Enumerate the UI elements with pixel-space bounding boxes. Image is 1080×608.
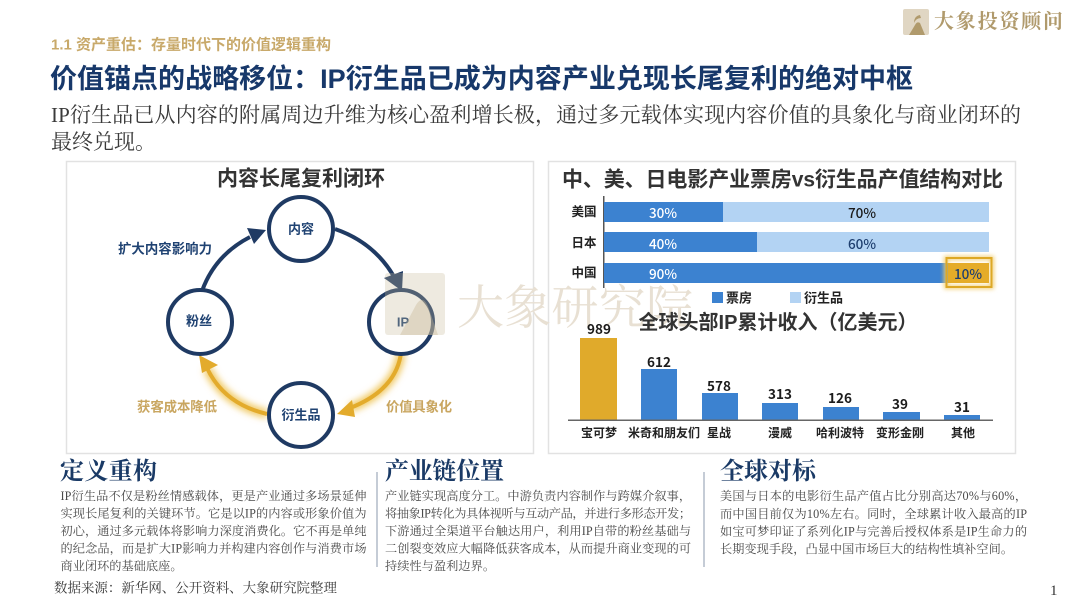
divider one [376, 472, 378, 567]
arrow: IP to derivatives [337, 353, 401, 417]
value chain text: 持续性与盈利边界。 [385, 558, 495, 573]
row: China [571, 258, 992, 287]
arrow: derivatives to fans [199, 355, 267, 414]
category labels: 宝可梦 [581, 425, 617, 440]
values: 39 [892, 393, 908, 413]
definition text: 商业闭环的基础底座。 [60, 558, 182, 573]
node: IP [369, 290, 433, 354]
chart heading: 全球头部IP累计收入（亿美元） [639, 310, 917, 334]
divider two [703, 472, 705, 567]
node: derivatives: 衍生品 [281, 408, 321, 422]
legend [712, 290, 843, 306]
watermark: 大象研究院 [457, 283, 693, 335]
node: derivatives [269, 383, 333, 447]
node: fans: 粉丝 [186, 314, 212, 328]
panel: content loop [66, 162, 534, 454]
category labels: 其他 [951, 425, 975, 440]
watermark [385, 273, 693, 335]
category labels: 星战 [707, 425, 731, 440]
definition text: 的纪念品，而是扩大IP影响力并构建内容创作与消费市场 [60, 540, 366, 556]
category labels [581, 425, 975, 440]
main title: 价值锚点的战略移位：IP衍生品已成为内容产业兑现长尾复利的绝对中枢 [50, 63, 913, 94]
label: expand influence: 扩大内容影响力 [118, 240, 212, 256]
values: 313 [768, 383, 792, 403]
page number: 1 [1050, 583, 1058, 599]
baseline [568, 420, 993, 421]
values: 126 [828, 387, 852, 407]
value chain heading: 产业链位置 [385, 458, 504, 485]
row: USA [571, 202, 989, 222]
values: 612 [647, 351, 671, 371]
benchmark heading: 全球对标 [720, 458, 818, 485]
node: fans [168, 290, 232, 354]
label: lower acquisition cost: 获客成本降低 [137, 398, 218, 414]
definition text: 初心，通过多元载体将影响力深度消费化。它不再是单纯 [60, 523, 366, 538]
values: 989 [587, 318, 611, 338]
loop heading: 内容长尾复利闭环 [217, 166, 385, 190]
benchmark text: 美国与日本的电影衍生品产值占比分别高达70%与60%， [720, 488, 1027, 503]
value chain text: 二创裂变效应大幅降低获客成本，从而提升商业变现的可 [385, 540, 691, 556]
column: global benchmark [720, 458, 1027, 556]
node: content: 内容 [288, 222, 314, 236]
category labels: 变形金刚 [876, 425, 924, 440]
label: value materialised: 价值具象化 [386, 398, 453, 414]
subtitle: IP衍生品已从内容的附属周边升维为核心盈利增长极，通过多元载体实现内容价值的具象化与商业闭环的 [51, 103, 1021, 128]
node: IP: IP [397, 314, 409, 330]
values [587, 318, 970, 416]
data source: 数据来源：新华网、公开资料、大象研究院整理 [54, 580, 338, 596]
values: 578 [707, 375, 731, 395]
subtitle [51, 103, 1021, 154]
value chain text: 将抽象IP转化为具体视听与互动产品，并进行多形态开发； [385, 506, 691, 520]
row: Japan: 60% [848, 233, 876, 253]
revenue bar chart [568, 310, 993, 440]
category labels: 漫威 [768, 425, 792, 440]
node: content [269, 197, 333, 261]
column: definition [60, 458, 366, 573]
section tag: 1.1 资产重估：存量时代下的价值逻辑重构 [51, 36, 331, 54]
value chain text: 产业链实现高度分工。中游负责内容制作与跨媒介叙事， [385, 488, 691, 503]
definition text [60, 488, 366, 573]
brand logo [903, 9, 1063, 35]
row: USA: 30% [649, 202, 677, 222]
benchmark text: 而中国目前仅为10%左右。同时，全球累计收入最高的IP [720, 506, 1027, 521]
benchmark text: 如宝可梦印证了系列化IP与完善后授权体系是IP生命力的 [720, 524, 1027, 538]
category labels: 米奇和朋友们 [628, 425, 700, 440]
definition text: IP衍生品不仅是粉丝情感载体，更是产业通过多场景延伸 [60, 488, 366, 503]
row: USA: 美国 [571, 204, 597, 219]
row: Japan: 日本 [571, 235, 597, 250]
chart heading: 中、美、日电影产业票房vs衍生品产值结构对比 [562, 168, 1003, 192]
definition heading: 定义重构 [60, 458, 157, 485]
row: USA: 70% [848, 202, 876, 222]
legend: 票房 [726, 290, 752, 306]
arrow: fans to content [202, 228, 266, 291]
definition text: 实现长尾复利的关键环节。它是以IP的内容或形象价值为 [60, 506, 366, 520]
row: China: 90% [649, 263, 677, 283]
row: China: 中国 [571, 265, 597, 280]
panel: charts [548, 162, 1016, 454]
value chain text: 下游通过全渠道平台触达用户，利用IP自带的粉丝基础与 [385, 523, 691, 538]
brand logo: 大象投资顾问 [934, 10, 1063, 33]
benchmark text: 长期变现手段，凸显中国市场巨大的结构性填补空间。 [720, 541, 1013, 556]
row: China: 10% [954, 263, 982, 283]
category labels: 哈利波特 [816, 425, 864, 440]
bars [580, 338, 980, 420]
benchmark text [720, 488, 1027, 556]
stacked bar chart [562, 168, 1003, 306]
value chain text [385, 488, 691, 573]
subtitle: 最终兑现。 [51, 130, 156, 154]
arrow: content to IP [335, 229, 403, 291]
values: 31 [954, 396, 970, 416]
column: value chain [385, 458, 691, 573]
axis [603, 196, 604, 288]
row: Japan [571, 232, 989, 253]
legend: 衍生品 [804, 290, 843, 306]
row: Japan: 40% [649, 233, 677, 253]
